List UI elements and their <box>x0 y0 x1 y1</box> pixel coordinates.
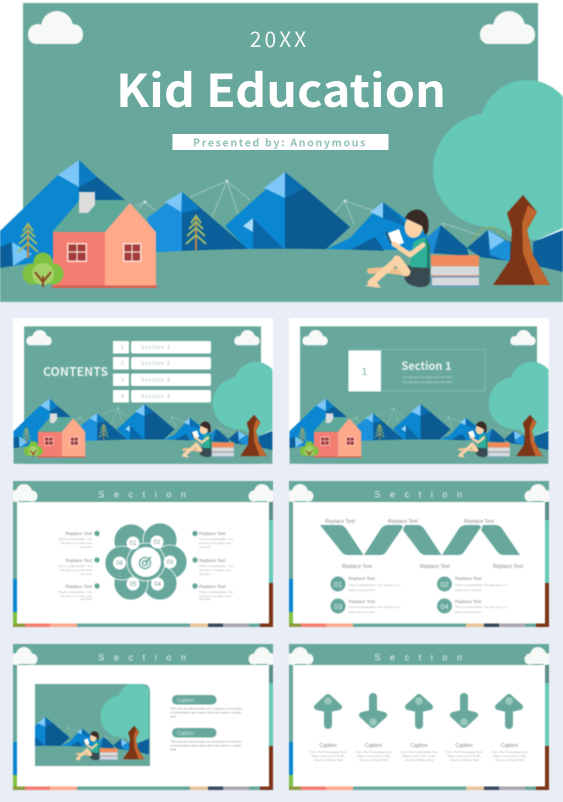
panel: ribbon diagram slide <box>286 481 552 627</box>
title: Kid Education <box>116 55 446 120</box>
section title box: 1 <box>362 367 368 378</box>
arrow captions: From The Presentation And <box>310 750 347 754</box>
caption block one: field <box>170 714 176 718</box>
right labels: Replace Text <box>199 558 226 563</box>
slide heading: Section <box>98 652 196 662</box>
arrow captions: Make It Into A Film To Be <box>402 754 436 758</box>
left labels: This is a placeholder. You <box>58 590 92 594</box>
presenter bar: Presented by: Anonymous <box>193 136 367 150</box>
numbered items: This is a placeholder. You can key in or <box>348 583 400 587</box>
ribbon labels: Replace Text <box>325 519 355 525</box>
caption block one: The user can demonstrate on a projector or computer, <box>170 706 242 710</box>
arrow captions: From The Presentation And <box>401 750 438 754</box>
section title box: You can key in or paste your text here <box>402 380 453 384</box>
arrow captions: Caption <box>319 743 337 749</box>
numbered items: 02 <box>440 580 449 589</box>
numbered items: 03 <box>334 602 342 611</box>
contents list: Section 4 <box>141 394 171 400</box>
caption block one: Caption <box>177 698 194 704</box>
arrow captions: From The Presentation And <box>491 750 528 754</box>
panel: hero cover slide <box>0 0 563 302</box>
right labels: text here <box>199 597 211 601</box>
arrow up three <box>498 697 520 725</box>
numbered items: paste your text here <box>455 588 482 592</box>
arrow captions: Used In A Wider Field <box>314 758 343 762</box>
arrow down one <box>362 697 384 726</box>
right labels: can key in or paste your <box>199 541 231 545</box>
right labels <box>192 531 233 601</box>
illustration: contents background <box>14 326 283 464</box>
left labels: Replace Text <box>66 531 93 536</box>
caption block one <box>170 695 242 718</box>
numbered items: This is a placeholder. You can key in or <box>455 583 507 587</box>
flower diagram <box>105 523 187 600</box>
arrow captions: From The Presentation And <box>355 750 392 754</box>
right labels: can key in or paste your <box>199 568 231 572</box>
arrow captions: Make It Into A Film To Be <box>447 754 481 758</box>
left labels <box>58 531 100 601</box>
illustration: mountains, house, child reading, tree <box>0 3 563 302</box>
right labels: Replace Text <box>199 531 226 536</box>
right labels: text here <box>199 545 211 549</box>
contents list: 1 <box>121 345 124 351</box>
arrow captions: Used In A Wider Field <box>359 758 388 762</box>
left labels: Replace Text <box>66 584 93 589</box>
arrow captions: Used In A Wider Field <box>450 758 479 762</box>
numbered items <box>330 576 507 614</box>
ribbon labels: Replace Text <box>342 564 372 570</box>
arrow up one <box>317 697 339 725</box>
numbered items: This is a placeholder. You can key in or <box>455 605 507 609</box>
contents heading: CONTENTS <box>43 363 108 380</box>
contents list: Section 3 <box>141 378 171 384</box>
section title box <box>348 350 485 392</box>
arrow captions <box>310 743 528 762</box>
ribbon chart <box>320 525 520 555</box>
arrow captions: Caption <box>455 743 473 749</box>
slide heading: Section <box>374 652 472 662</box>
illustration: section background <box>290 326 559 464</box>
ribbon labels <box>325 519 523 570</box>
section title box: You can key in or paste your text here <box>402 375 453 379</box>
picture: child under tree <box>34 683 151 767</box>
contents list: Section 2 <box>141 361 171 367</box>
right labels: This is a placeholder. You <box>199 564 233 568</box>
flower diagram: 04 <box>154 582 161 588</box>
contents list <box>113 341 211 402</box>
numbered items: Replace Text <box>455 576 482 581</box>
section title box: Section 1 <box>402 358 452 374</box>
caption block two: The user can demonstrate on a projector or computer, <box>170 740 242 744</box>
ribbon labels: Replace Text <box>388 519 418 525</box>
arrow captions: Caption <box>365 743 382 749</box>
numbered items: Replace Text <box>455 599 482 604</box>
arrow captions: Used In A Wider Field <box>495 758 524 762</box>
flower diagram: 03 <box>167 560 174 566</box>
left labels: This is a placeholder. You <box>58 537 92 541</box>
left labels: can key in or paste your <box>60 568 92 572</box>
numbered items: 01 <box>334 580 342 589</box>
slide heading: Section <box>98 490 196 500</box>
arrow chart <box>317 697 520 726</box>
caption block two: Caption <box>177 731 194 737</box>
arrow captions: Used In A Wider Field <box>405 758 434 762</box>
ribbon labels: Replace Text <box>420 564 450 570</box>
year label: 20XX <box>250 24 309 54</box>
arrow up two <box>408 697 430 725</box>
left labels: text here <box>80 545 92 549</box>
arrow captions: Make It Into A Film To Be <box>493 754 526 758</box>
arrow down two <box>453 697 475 726</box>
panel: section 1 slide <box>289 318 559 464</box>
arrow captions: Caption <box>410 743 428 749</box>
flower diagram: 06 <box>116 561 123 567</box>
numbered items: Replace Text <box>348 576 376 581</box>
right labels: This is a placeholder. You <box>199 537 233 541</box>
left labels: Replace Text <box>66 558 93 563</box>
numbered items: 04 <box>440 602 449 611</box>
panel: picture and captions slide <box>0 644 276 790</box>
left labels: text here <box>80 597 92 601</box>
numbered items: Replace Text <box>348 599 376 604</box>
numbered items: This is a placeholder. You can key in or <box>348 605 400 609</box>
arrow captions: Caption <box>501 743 518 749</box>
icon: target <box>140 557 151 568</box>
left labels: can key in or paste your <box>60 594 92 598</box>
caption block one: or presentation and make it film to be used in a wider <box>170 710 241 714</box>
left labels: can key in or paste your <box>60 541 92 545</box>
slide heading: Section <box>374 490 472 500</box>
ribbon labels: Replace Text <box>493 564 523 570</box>
right labels: can key in or paste your <box>199 594 231 598</box>
panel: flower diagram slide <box>10 481 276 627</box>
contents list: 3 <box>121 378 124 384</box>
contents list: Section 1 <box>141 345 171 351</box>
right labels: Replace Text <box>199 584 226 589</box>
flower diagram: 02 <box>154 540 161 546</box>
flower diagram: 05 <box>130 582 137 588</box>
contents list: 4 <box>121 394 124 400</box>
caption block two: field <box>170 748 176 752</box>
numbered items: paste your text here <box>455 610 482 614</box>
arrow captions: Make It Into A Film To Be <box>311 754 345 758</box>
contents list: 2 <box>121 361 124 367</box>
panel: contents slide <box>13 318 283 464</box>
left labels: text here <box>80 572 92 576</box>
caption block two: or presentation and make it film to be used in a wider <box>170 744 241 748</box>
left labels: This is a placeholder. You <box>58 564 92 568</box>
caption block two <box>170 728 242 752</box>
flower diagram: 01 <box>130 541 137 547</box>
arrow captions: From The Presentation And <box>446 750 483 754</box>
numbered items: paste your text here <box>348 588 375 592</box>
ribbon labels: Replace Text <box>464 519 494 525</box>
right labels: This is a placeholder. You <box>199 590 233 594</box>
panel: arrows slide <box>286 644 552 790</box>
arrow captions: Make It Into A Film To Be <box>357 754 390 758</box>
numbered items: paste your text here <box>348 610 375 614</box>
right labels: text here <box>199 572 211 576</box>
